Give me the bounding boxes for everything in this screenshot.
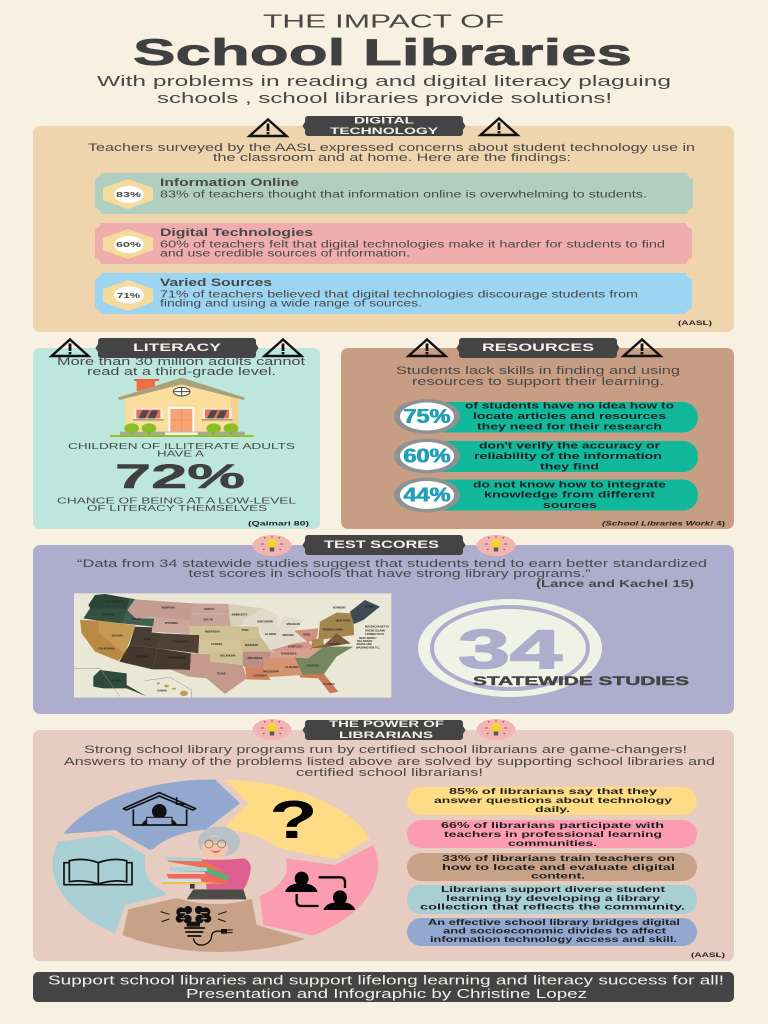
title: the impact of: THE IMPACT OF [263, 10, 504, 32]
finding: varied sources [95, 273, 692, 314]
segment: pink [260, 845, 378, 936]
resources statement: resources to support their learning. [412, 376, 664, 388]
stat pill: 44% [394, 478, 698, 512]
wheel diagram [53, 779, 378, 952]
finding: information online [95, 173, 693, 214]
icon: warning right [480, 118, 518, 135]
segment: teal [53, 835, 167, 933]
illustration: librarian with books [161, 826, 251, 899]
fact pill: technology questions [407, 786, 697, 815]
fact pill: digital content: 33% of librarians train teachers on [442, 853, 675, 863]
fact pill: technology questions: answer questions about technology [434, 795, 673, 805]
citation: (AASL) [678, 320, 712, 327]
intro text [64, 744, 715, 779]
map of the united states: NEW YORK [336, 619, 350, 623]
stat pill: 60%: 60% [403, 446, 450, 468]
title: school libraries: School Libraries [133, 31, 632, 73]
map of the united states: MARYLAND [357, 642, 372, 646]
map of the united states: GEORGIA [307, 664, 319, 668]
literacy caption bottom: OF LITERACY THEMSELVES [87, 503, 268, 513]
map of the united states: KENTUCKY [288, 645, 303, 649]
map of the united states: ALASKA [110, 678, 121, 682]
map of the united states: OHIO [303, 633, 310, 637]
icon: house [110, 378, 253, 437]
map of the united states: OREGON [103, 612, 115, 616]
map of the united states: ILLINOIS [265, 632, 276, 636]
stat pill: 44%: 44% [403, 484, 450, 506]
map of the united states: KANSAS [211, 642, 222, 646]
map of the united states [74, 593, 391, 698]
fact pill: diverse collection: collection that reflects the community. [420, 902, 685, 912]
wheel hub [145, 829, 287, 904]
finding: information online: 83% of teachers thought that information online is overwhelming to students. [160, 190, 647, 200]
finding: digital technologies: 60% [116, 240, 142, 249]
icon: warning left [250, 120, 286, 136]
fact pill: bridging divides: An effective school library bridges digital [428, 917, 680, 927]
map of the united states: TEXAS [217, 671, 226, 675]
intro text: the classroom and at home. Here are the findings: [213, 152, 571, 164]
icon: warning left [52, 340, 88, 356]
footer banner: Presentation and Infographic by Christine Lopez [186, 986, 587, 1001]
stat: 34 statewide studies: STATEWIDE STUDIES [473, 674, 689, 688]
stat pill: 60% [394, 438, 698, 474]
fact pill: professional learning: communities. [508, 838, 597, 848]
literacy caption top [68, 441, 296, 458]
literacy caption top: CHILDREN OF ILLITERATE ADULTS [68, 441, 296, 451]
stat pill: 75%: 75% [403, 406, 450, 428]
map of the united states: ARKANSAS [247, 656, 263, 660]
finding: varied sources: Varied Sources [160, 277, 272, 289]
map of the united states: IDAHO [132, 617, 141, 621]
icon: open book [64, 859, 132, 885]
map of the united states: OKLAHOMA [220, 654, 236, 658]
heading badge: digital technology: DIGITAL [354, 116, 414, 126]
fact pill: professional learning: teachers in professional learning [444, 829, 662, 839]
intro text [88, 142, 695, 164]
icon: bulb left [252, 719, 292, 740]
panel: resources [341, 338, 734, 529]
map of the united states: NORTH [204, 607, 214, 611]
heading badge: the power of librarians [302, 719, 466, 741]
footer banner: Support school libraries and support lifelong learning and literacy success for all! [48, 972, 724, 988]
fact pill: digital content: how to locate and evaluate digital [442, 862, 675, 872]
segment: yellow [223, 779, 370, 859]
map of the united states: MAINE [365, 604, 374, 608]
heading badge: the power of librarians: THE POWER OF [329, 719, 444, 730]
icon: brain bulb [161, 906, 233, 945]
segment: blue [63, 779, 240, 850]
finding: digital technologies: and use credible sources of information. [160, 248, 410, 260]
citation: (School Libraries Work! 4) [602, 520, 725, 528]
map of the united states: VIRGINIA [328, 642, 340, 646]
fact pill: technology questions: daily. [535, 804, 570, 814]
icon: question mark: ? [269, 790, 318, 850]
intro text: Answers to many of the problems listed above are solved by supporting school libraries and [64, 756, 715, 768]
map of the united states: WASHINGTON [105, 600, 123, 604]
segment: brown [123, 898, 305, 952]
map of the united states: FLORIDA [323, 682, 335, 686]
citation: (Qaimari 80) [248, 520, 309, 528]
map of the united states: SOUTH [204, 618, 213, 622]
heading badge: test scores: TEST SCORES [324, 539, 439, 551]
fact pill: technology questions: 85% of librarians say that they [449, 786, 658, 796]
map of the united states: ARIZONA [137, 655, 149, 659]
map of the united states: PENNSYLVANIA [323, 628, 343, 632]
fact pill: bridging divides: and socioeconomic divides to affect [443, 926, 666, 936]
stat pill: 60%: they find [540, 462, 599, 472]
stat pill: 75%: they need for their research [477, 422, 662, 432]
stat pill: 60%: reliability of the information [474, 451, 662, 462]
finding: varied sources: 71% of teachers believed that digital technologies discourage students from [160, 290, 638, 300]
subtitle: With problems in reading and digital literacy plaguing [97, 73, 671, 90]
map of the united states: MASSACHUSETTS [365, 624, 389, 628]
icon: bulb right [476, 719, 516, 740]
literacy caption bottom: CHANCE OF BEING AT A LOW-LEVEL [57, 496, 296, 506]
heading badge: digital technology [302, 116, 466, 137]
map of the united states: MICHIGAN [287, 622, 300, 626]
literacy caption top: HAVE A [157, 448, 205, 458]
map of the united states: NEBRASKA [205, 630, 220, 634]
heading badge: digital technology: TECHNOLOGY [330, 126, 439, 137]
fact pill: professional learning: 66% of librarians participate with [441, 820, 664, 830]
stat pill: 44%: do not know how to integrate [473, 480, 666, 490]
stat pill: 75%: of students have no idea how to [465, 400, 674, 412]
finding: digital technologies [95, 223, 692, 264]
heading badge: literacy [96, 338, 258, 358]
map of the united states: NEVADA [112, 634, 123, 638]
panel: test scores [33, 535, 734, 714]
fact pill: diverse collection [407, 884, 697, 914]
map of the united states: ALABAMA [285, 665, 298, 669]
stat pill: 44%: sources [543, 500, 597, 511]
map of the united states: DELAWARE [357, 639, 373, 643]
panel: digital technology [33, 116, 734, 332]
icon: warning right [264, 340, 302, 356]
literacy caption bottom [57, 496, 296, 513]
map of the united states: COLORADO [173, 639, 188, 643]
map of the united states: NEW MEXICO [168, 655, 186, 659]
icon: bulb right [476, 535, 516, 556]
fact pill: digital content: content. [531, 870, 585, 880]
map of the united states: WASHINGTON D.C. [356, 646, 381, 650]
finding: digital technologies: 60% of teachers felt that digital technologies make it harder for students to find [160, 240, 665, 250]
fact pill: bridging divides [407, 917, 697, 946]
subtitle [97, 73, 671, 107]
map of the united states: INDIANA [283, 633, 294, 637]
map of the united states: VERMONT [333, 605, 346, 609]
quote: test scores in schools that have strong library programs.” [188, 568, 591, 580]
finding: digital technologies: Digital Technologies [160, 227, 313, 239]
icon: warning right [624, 340, 660, 356]
map of the united states: TENNESSEE [281, 651, 297, 655]
fact pill: diverse collection: Librarians support diverse student [441, 884, 665, 894]
map of the united states: IOWA [242, 628, 249, 632]
literacy statement [57, 356, 305, 378]
quote [77, 558, 707, 590]
stat pill: 75% [394, 399, 698, 434]
quote: (Lance and Kachel 15) [536, 578, 694, 590]
heading badge: the power of librarians: LIBRARIANS [339, 730, 433, 741]
stat pill: 75%: locate articles and resources [473, 411, 666, 422]
icon: people exchange [285, 872, 355, 910]
map of the united states: NEW JERSEY [359, 636, 377, 640]
intro text: certified school librarians! [296, 767, 483, 779]
finding: information online: Information Online [160, 177, 299, 189]
stat: 34 statewide studies: 34 [458, 618, 563, 680]
map of the united states: WISCONSIN [257, 619, 273, 623]
stat: 72%: 72% [115, 458, 245, 496]
map of the united states: CALIFORNIA [98, 646, 115, 650]
heading badge: resources: RESOURCES [482, 342, 594, 354]
map of the united states: UTAH [144, 637, 151, 641]
icon: warning left [408, 340, 446, 356]
resources statement: Students lack skills in finding and using [396, 365, 680, 377]
map of the united states: RHODE ISLAND [365, 628, 385, 632]
heading badge: resources [456, 338, 620, 358]
fact pill: diverse collection: learning by developing a library [446, 893, 661, 903]
map of the united states: MINNESOTA [232, 612, 247, 616]
map of the united states: MISSISSIPPI [263, 670, 279, 674]
stat: 34 statewide studies [418, 599, 689, 697]
panel: literacy [33, 338, 320, 529]
map of the united states: MISSOURI [245, 643, 258, 647]
citation: (AASL) [691, 952, 725, 959]
resources statement [396, 365, 680, 388]
intro text: Teachers surveyed by the AASL expressed concerns about student technology use in [88, 142, 695, 154]
heading badge: test scores [302, 535, 466, 555]
fact pill: professional learning [407, 820, 697, 848]
icon: home laptop [123, 793, 196, 825]
map of the united states: LOUISIANA [253, 674, 267, 678]
heading badge: literacy: LITERACY [133, 342, 222, 354]
icon: bulb left [252, 535, 292, 556]
literacy statement: read at a third-grade level. [87, 366, 276, 378]
fact pill: bridging divides: information technology access and skill. [430, 934, 677, 944]
stat pill: 44%: knowledge from different [484, 490, 656, 500]
map of the united states: HAWAII [157, 689, 167, 693]
stat pill: 60%: don't verify the accuracy or [479, 440, 660, 452]
panel: the power of librarians [33, 719, 734, 961]
finding: information online: 83% [116, 190, 142, 199]
literacy statement: More than 30 million adults cannot [57, 356, 305, 368]
finding: varied sources: finding and using a wide range of sources. [160, 298, 422, 310]
quote: “Data from 34 statewide studies suggest that students tend to earn better standardized [77, 558, 707, 570]
map of the united states: WYOMING [165, 621, 178, 625]
intro text: Strong school library programs run by certified school librarians are game-changers! [84, 744, 687, 756]
subtitle: schools , school libraries provide solutions! [157, 90, 612, 107]
map of the united states: MONTANA [162, 605, 175, 609]
finding: varied sources: 71% [117, 291, 141, 300]
fact pill: digital content [407, 853, 697, 881]
map of the united states: CONNECTICUT [365, 632, 385, 636]
footer banner [33, 972, 734, 1002]
